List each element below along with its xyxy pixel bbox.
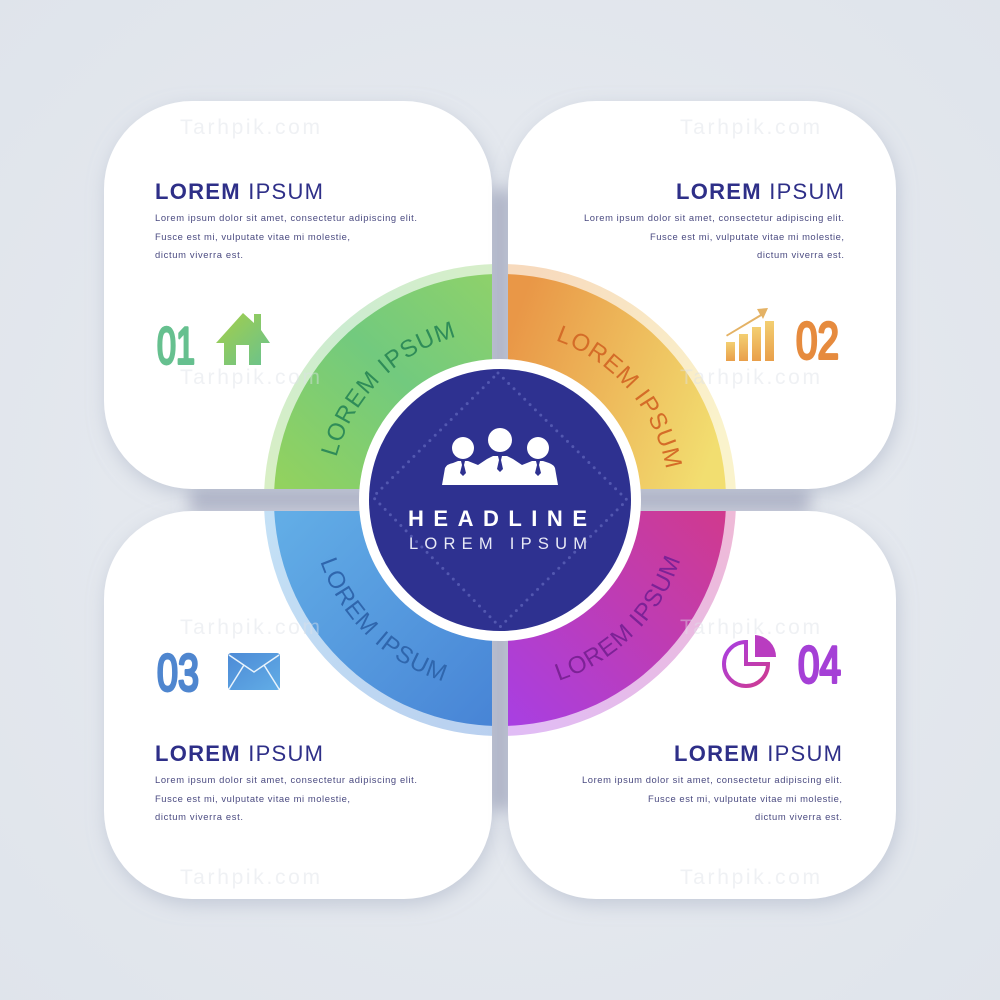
card 01 body text: Lorem ipsum dolor sit amet, consectetur adipiscing elit. xyxy=(155,212,417,223)
watermarks: Tarhpik.com xyxy=(680,366,820,389)
number 02: 02 xyxy=(796,312,839,370)
card 04 body text: dictum viverra est. xyxy=(755,811,842,822)
number 03: 03 xyxy=(157,644,199,702)
center hub xyxy=(359,359,641,641)
card 01 body text: Fusce est mi, vulputate vitae mi molestie, xyxy=(155,231,350,242)
watermarks: Tarhpik.com xyxy=(180,616,320,639)
card 01 body text: dictum viverra est. xyxy=(155,249,243,260)
orange pale ring xyxy=(508,264,736,489)
watermarks: Tarhpik.com xyxy=(680,866,820,889)
segment: purple quadrant xyxy=(508,511,736,736)
green pale ring xyxy=(264,264,492,489)
card 03 body text xyxy=(155,774,417,822)
watermarks: Tarhpik.com xyxy=(180,366,320,389)
number 01: 01 xyxy=(157,318,195,376)
number 04: 04 xyxy=(798,636,841,694)
icon: house xyxy=(216,313,270,365)
curved label: blue: LOREM IPSUM xyxy=(321,558,447,681)
card 02 body text: Lorem ipsum dolor sit amet, consectetur adipiscing elit. xyxy=(584,212,844,223)
card 02 shape xyxy=(508,101,896,489)
card 03 body text: dictum viverra est. xyxy=(155,811,243,822)
card 02 body text: dictum viverra est. xyxy=(757,249,844,260)
curved label: orange: LOREM IPSUM xyxy=(557,326,682,468)
card 03 body text: Lorem ipsum dolor sit amet, consectetur adipiscing elit. xyxy=(155,774,417,785)
hub navy disc xyxy=(369,369,631,631)
segment: orange quadrant xyxy=(508,264,736,489)
segment: green quadrant xyxy=(264,264,492,489)
hub white ring xyxy=(359,359,641,641)
orange band xyxy=(508,274,726,489)
card 01 body text xyxy=(155,212,417,260)
card 03 heading: LOREM IPSUM xyxy=(155,741,323,766)
card 04 shape xyxy=(508,511,896,899)
green band xyxy=(274,274,492,489)
icon: envelope xyxy=(228,653,280,690)
card 01 shape xyxy=(104,101,492,489)
blue pale ring xyxy=(264,511,492,736)
curved label: purple: LOREM IPSUM xyxy=(554,556,680,680)
watermarks: Tarhpik.com xyxy=(180,116,320,139)
watermarks: Tarhpik.com xyxy=(180,866,320,889)
watermarks xyxy=(180,116,820,889)
card 01 heading: LOREM IPSUM xyxy=(155,179,323,204)
card 03 shape xyxy=(104,511,492,899)
card 03 body text: Fusce est mi, vulputate vitae mi molestie, xyxy=(155,793,350,804)
purple band xyxy=(508,511,726,726)
card 02 heading: LOREM IPSUM xyxy=(676,179,844,204)
blue band xyxy=(274,511,492,726)
icon: three business people xyxy=(442,428,558,485)
card 04 heading: LOREM IPSUM xyxy=(674,741,842,766)
segment: blue quadrant xyxy=(264,511,492,736)
icon: pie chart xyxy=(724,635,776,686)
icon: rising bar chart xyxy=(726,308,774,361)
gap shadow xyxy=(190,190,810,810)
sub headline: LOREM IPSUM xyxy=(409,535,587,553)
panel: card 04 xyxy=(508,511,896,899)
card 02 body text xyxy=(584,212,844,260)
dotted diamond pattern xyxy=(373,373,627,627)
watermarks: Tarhpik.com xyxy=(680,116,820,139)
panel: card 03 xyxy=(104,511,492,899)
panel: card 01 xyxy=(104,101,492,489)
headline: HEADLINE xyxy=(408,506,587,531)
purple pale ring xyxy=(508,511,736,736)
watermarks: Tarhpik.com xyxy=(680,616,820,639)
panel: card 02 xyxy=(508,101,896,489)
card 04 body text xyxy=(582,774,842,822)
card 04 body text: Lorem ipsum dolor sit amet, consectetur adipiscing elit. xyxy=(582,774,842,785)
card 04 body text: Fusce est mi, vulputate vitae mi molestie, xyxy=(648,793,842,804)
card 02 body text: Fusce est mi, vulputate vitae mi molestie, xyxy=(650,231,844,242)
curved label: green: LOREM IPSUM xyxy=(321,321,454,456)
